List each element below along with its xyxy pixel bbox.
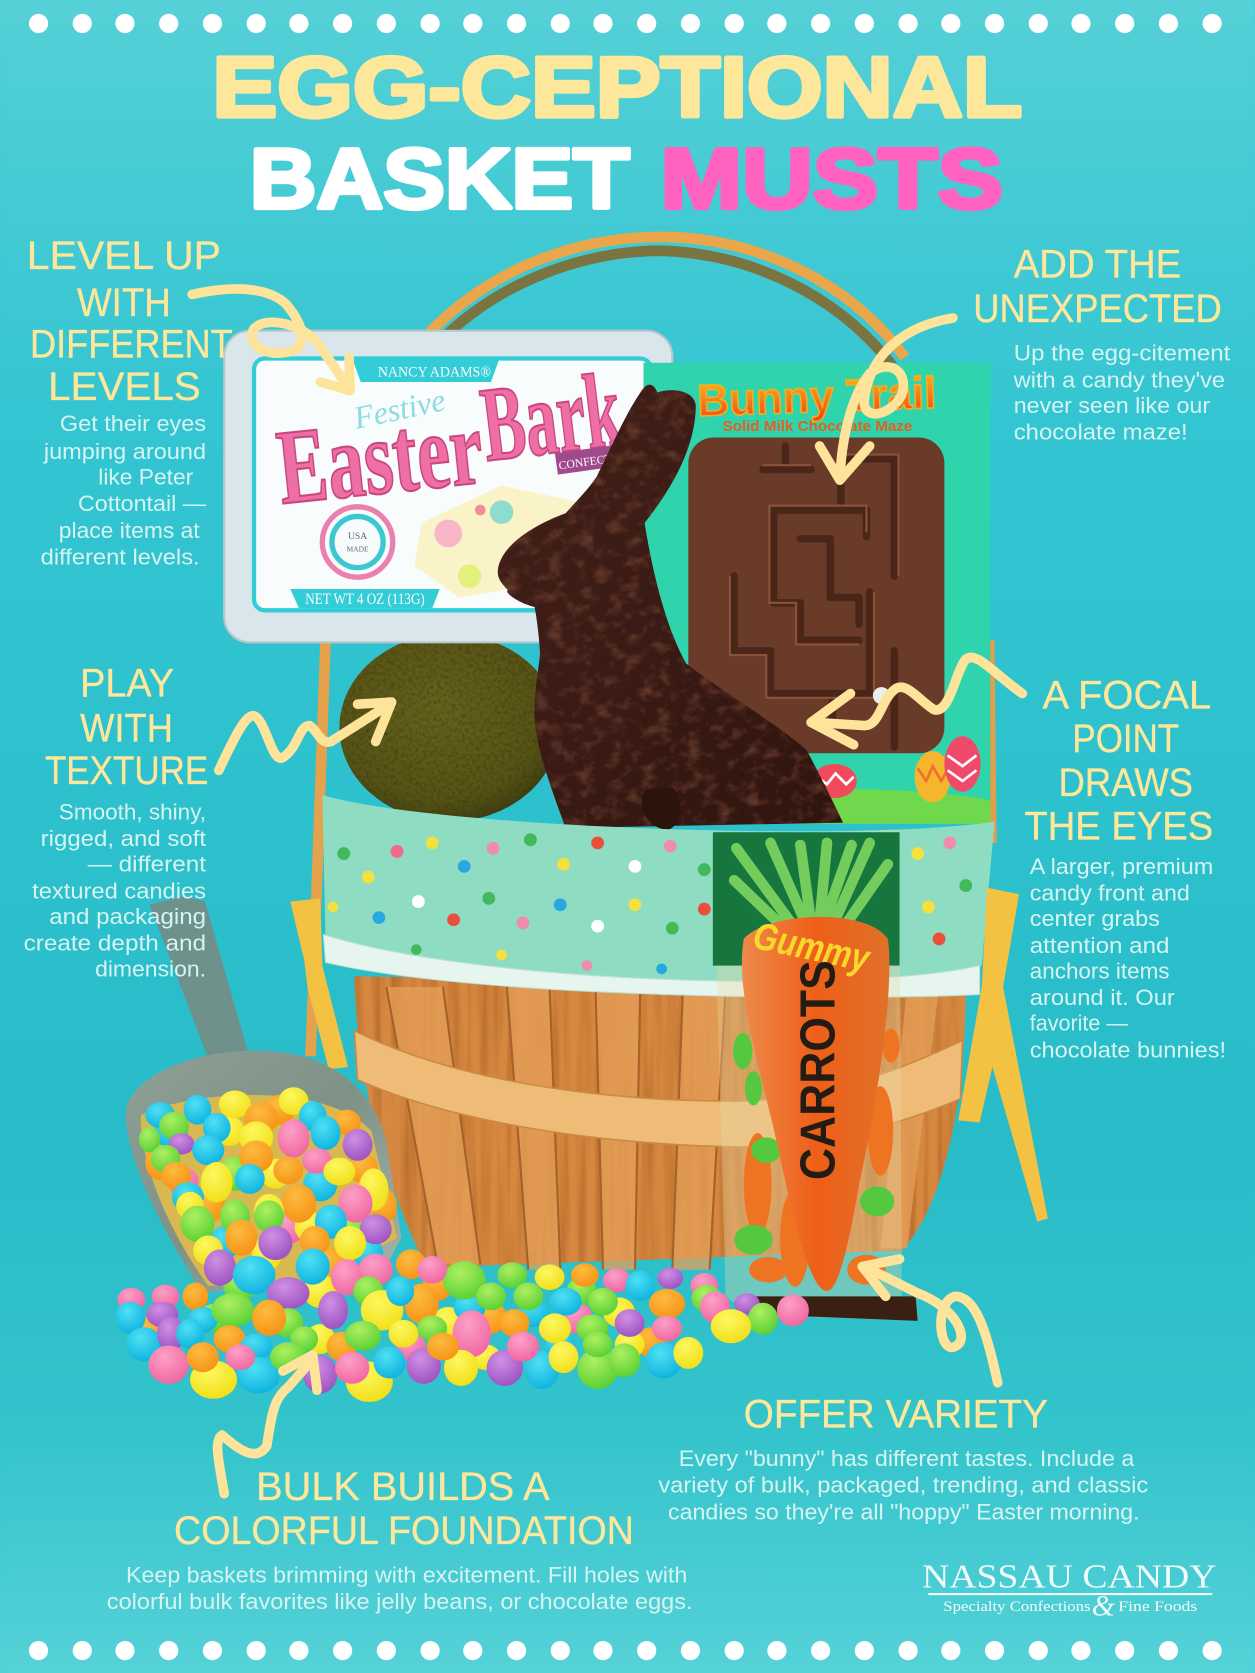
- bottom dotted border: [29, 1641, 1222, 1660]
- title: EGG-CEPTIONAL: [212, 40, 1022, 135]
- arrow: bulk: [218, 1355, 317, 1494]
- text: bulk body: colorful bulk favorites like jelly beans, or chocolate eggs.: [107, 1589, 693, 1614]
- text: level up body: place items at: [59, 518, 200, 543]
- text: focal point body: attention and: [1030, 933, 1170, 958]
- text: unexpected body: chocolate maze!: [1014, 420, 1188, 445]
- easter bark tin: [224, 331, 672, 642]
- basket liner: [322, 795, 995, 997]
- moss ball: [339, 634, 559, 822]
- heading: unexpected: [973, 242, 1222, 331]
- heading: level up: [27, 234, 233, 409]
- text: texture body: and packaging: [49, 904, 206, 929]
- text: focal point body: chocolate bunnies!: [1030, 1037, 1226, 1062]
- basket handle: [311, 237, 993, 1056]
- chocolate maze box: Bunny Trail: [697, 368, 937, 426]
- heading: bulk: COLORFUL FOUNDATION: [174, 1509, 634, 1553]
- text: texture body: create depth and: [24, 931, 206, 956]
- text: focal point body: A larger, premium: [1030, 854, 1213, 879]
- text: texture body: [24, 799, 207, 981]
- easter bark tin: Festive: [349, 381, 448, 436]
- text: variety body: variety of bulk, packaged, trending, and classic: [658, 1473, 1148, 1498]
- text: focal point body: candy front and: [1030, 881, 1190, 906]
- heading: bulk: BULK BUILDS A: [256, 1465, 550, 1509]
- arrow: unexpected: [820, 318, 953, 480]
- logo: nassau candy: NASSAU CANDY: [922, 1559, 1216, 1596]
- basket body: [354, 976, 966, 1270]
- text: unexpected body: [1013, 341, 1231, 445]
- chocolate bunny: [498, 385, 843, 830]
- text: unexpected body: with a candy they've: [1013, 367, 1225, 392]
- heading: focal point: THE EYES: [1024, 805, 1213, 849]
- title: MUSTS: [661, 132, 1003, 227]
- easter bark tin: Easter: [272, 389, 488, 527]
- title: BASKET: [250, 132, 630, 227]
- text: texture body: Smooth, shiny,: [59, 799, 206, 824]
- arrow: texture: [219, 702, 392, 770]
- text: level up body: [41, 411, 207, 569]
- text: texture body: textured candies: [32, 878, 206, 903]
- text: focal point body: around it. Our: [1030, 985, 1175, 1010]
- arrow: levels: [192, 289, 350, 391]
- text: texture body: dimension.: [95, 956, 206, 981]
- text: level up body: jumping around: [43, 439, 206, 464]
- heading: unexpected: ADD THE: [1014, 242, 1181, 286]
- arrow: focal point: [811, 657, 1022, 745]
- heading: focal point: POINT: [1072, 717, 1179, 761]
- text: focal point body: anchors items: [1030, 958, 1170, 983]
- gummy carrots bag: CARROTS: [791, 960, 845, 1180]
- heading: texture: WITH: [80, 707, 173, 751]
- text: level up body: like Peter: [98, 464, 194, 489]
- chocolate maze box: Solid Milk Chocolate Maze: [722, 418, 912, 435]
- logo: nassau candy: &: [1092, 1589, 1116, 1622]
- easter bark tin: NET WT 4 OZ (113G): [305, 591, 425, 608]
- text: variety body: Every "bunny" has different tastes. Include a: [679, 1446, 1135, 1471]
- gummy carrots bag: Gummy: [749, 914, 874, 981]
- heading: texture: TEXTURE: [45, 749, 208, 793]
- jelly bean pile: [115, 1249, 809, 1402]
- text: focal point body: center grabs: [1030, 906, 1160, 931]
- heading: bulk: [174, 1465, 634, 1553]
- text: texture body: — different: [88, 852, 207, 877]
- heading: level up: DIFFERENT: [30, 322, 233, 366]
- text: focal point body: [1030, 854, 1226, 1062]
- text: unexpected body: never seen like our: [1014, 393, 1211, 418]
- gummy carrots bag: [713, 830, 918, 1321]
- metal scoop: [126, 896, 401, 1293]
- left ribbon: [290, 898, 348, 1069]
- title: [212, 40, 1022, 227]
- heading: focal point: A FOCAL: [1043, 673, 1211, 717]
- heading: unexpected: UNEXPECTED: [973, 287, 1222, 331]
- heading: level up: LEVELS: [48, 365, 201, 409]
- top dotted border: [29, 14, 1222, 33]
- text: bulk body: [107, 1562, 693, 1614]
- logo: nassau candy: [922, 1559, 1216, 1622]
- jelly beans in scoop: [139, 1087, 397, 1309]
- easter bark tin: USA: [348, 531, 367, 542]
- heading: focal point: DRAWS: [1059, 761, 1193, 805]
- logo: nassau candy: Fine Foods: [1118, 1599, 1197, 1615]
- arrow: variety: [862, 1259, 998, 1383]
- easter bark tin: NANCY ADAMS®: [378, 365, 491, 381]
- text: texture body: rigged, and soft: [41, 826, 207, 851]
- text: variety body: candies so they're all "hoppy" Easter morning.: [668, 1499, 1140, 1524]
- chocolate maze box: [644, 363, 990, 824]
- easter bark tin: CONFECTION: [558, 449, 634, 472]
- right ribbon: [958, 888, 1048, 1222]
- text: level up body: Get their eyes: [60, 411, 206, 436]
- text: variety body: [658, 1446, 1148, 1524]
- heading: focal point: [1024, 673, 1213, 849]
- text: bulk body: Keep baskets brimming with excitement. Fill holes with: [126, 1562, 687, 1587]
- easter bark tin: MADE: [347, 545, 369, 554]
- heading: texture: PLAY: [80, 662, 174, 706]
- text: unexpected body: Up the egg-citement: [1014, 341, 1231, 366]
- logo: nassau candy: Specialty Confections: [943, 1599, 1091, 1615]
- heading: texture: [45, 662, 208, 793]
- heading: level up: WITH: [77, 281, 171, 325]
- text: focal point body: favorite —: [1030, 1011, 1128, 1036]
- heading: level up: LEVEL UP: [27, 234, 221, 278]
- easter bark tin: Bark: [475, 351, 628, 485]
- text: level up body: Cottontail —: [78, 491, 207, 516]
- text: level up body: different levels.: [41, 544, 200, 569]
- heading: variety: OFFER VARIETY: [744, 1393, 1048, 1437]
